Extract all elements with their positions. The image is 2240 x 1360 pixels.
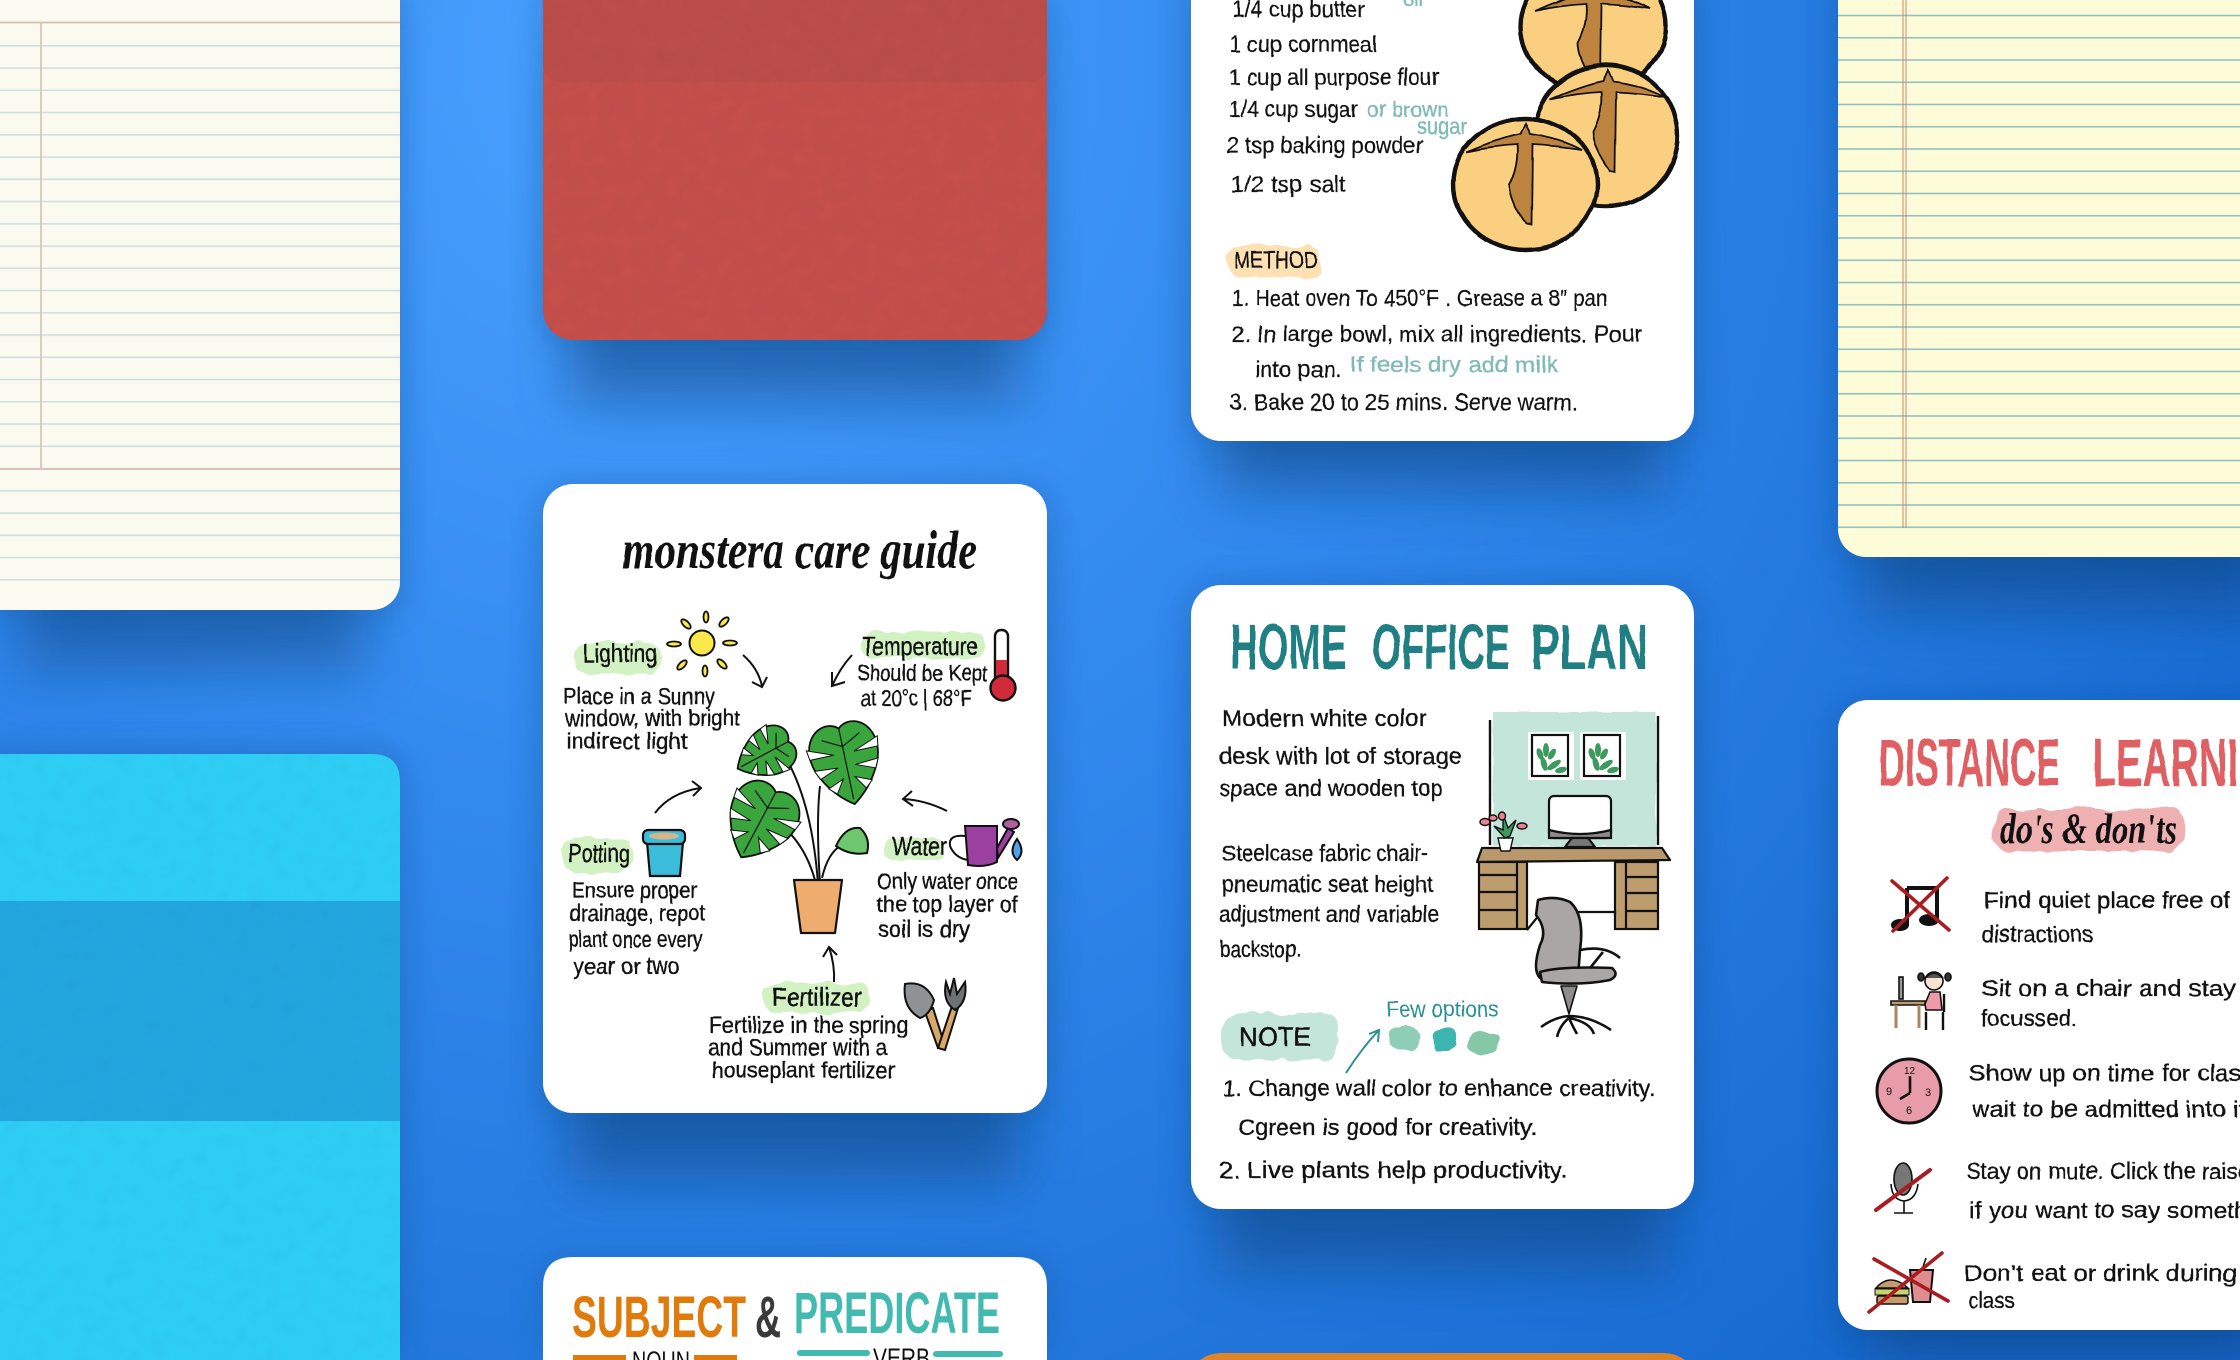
text: lighting: Lighting [583, 638, 657, 668]
heading: monstera care guide: monstera care guide [622, 520, 977, 580]
panel: cream ruled notebook page [0, 0, 406, 670]
method steps: 2. In large bowl, mix all ingredients. Pour [1232, 321, 1642, 347]
ingredients list: 1 cup cornmeal [1229, 31, 1377, 57]
method steps: 3. Bake 20 to 25 mins. Serve warm. [1229, 389, 1578, 415]
icon: monstera plant [709, 716, 890, 933]
panel: home office plan card [1185, 582, 1700, 1270]
icon: garden tools [905, 978, 966, 1050]
text: do item 3 [1969, 1060, 2240, 1122]
ingredients list: 1 cup all purpose flour [1229, 64, 1439, 90]
icon: clock: 12 [1904, 1066, 1916, 1077]
text: water: Only water once [877, 868, 1018, 894]
icon: blue pot [643, 830, 685, 876]
text: fertilizer: Fertilize in the spring [709, 1012, 908, 1038]
icon: clock: 3 [1925, 1087, 1931, 1099]
icon: clock: 9 [1886, 1086, 1892, 1098]
method steps: If feels dry add milk [1350, 352, 1559, 377]
heading: home office plan: OFFICE [1372, 611, 1510, 683]
ingredients list: or brown [1367, 97, 1449, 122]
arrow: temperature to plant [832, 655, 852, 686]
text: notes list [1219, 1075, 1655, 1183]
icon: office chair [1536, 898, 1620, 1037]
subheading blob [1993, 809, 2186, 851]
text: do item 5 [1964, 1260, 2237, 1313]
illustration: bread buns [1453, 0, 1678, 250]
text: do item 5: Don't eat or drink during [1964, 1260, 2237, 1286]
heading: predicate: PREDICATE [794, 1281, 1000, 1346]
heading: home office plan: HOME [1230, 611, 1347, 683]
arrow: lighting to plant [743, 655, 767, 687]
text: fertilizer: and Summer with a [708, 1034, 887, 1060]
text: chair description: adjustment and variable [1219, 901, 1439, 927]
icon: no music [1891, 878, 1949, 931]
method steps: 1. Heat oven To 450°F . Grease a 8″ pan [1232, 285, 1608, 311]
text: potting: Ensure proper [572, 877, 697, 903]
text: lighting: indirect light [566, 728, 689, 754]
text: desk description [1219, 705, 1462, 801]
ingredients list [1227, 0, 1467, 197]
heading: home office plan: PLAN [1531, 611, 1648, 683]
heading: method: METHOD [1234, 247, 1318, 274]
note blob [1221, 1014, 1339, 1060]
text: water: Water [892, 831, 947, 861]
text: do item 2: focussed. [1981, 1005, 2077, 1031]
text: potting: Potting [568, 838, 630, 868]
panel: cyan notebook cover [0, 748, 406, 1360]
icon: no food or drink [1869, 1253, 1948, 1312]
heading: home office plan [1230, 611, 1648, 683]
icon: muted microphone [1876, 1163, 1930, 1213]
panel: monstera care guide card [537, 482, 1053, 1180]
text: potting: plant once every [568, 926, 702, 952]
text: fertilizer: houseplant fertilizer [712, 1057, 895, 1083]
text: potting: drainage, repot [570, 900, 706, 926]
panel: subject and predicate card [537, 1255, 1053, 1360]
ingredients list: sugar [1417, 114, 1467, 139]
text: notes list: 2. Live plants help productivity. [1219, 1157, 1568, 1183]
text: notes list: 1. Change wall color to enhance creativity. [1223, 1075, 1655, 1101]
text: do item 1: Find quiet place free of [1984, 887, 2231, 913]
text: do item 5: class [1968, 1287, 2015, 1313]
text: do item 3: Show up on time for class [1969, 1060, 2240, 1086]
icon: potted flowers [1480, 812, 1527, 851]
heading: subject: SUBJECT [572, 1285, 746, 1350]
arrow: water to plant [903, 791, 947, 811]
text: desk description: desk with lot of storage [1219, 743, 1462, 769]
text: lighting: Place in a Sunny [563, 683, 715, 709]
text: do item 1 [1982, 887, 2231, 947]
text: fertilizer [708, 982, 908, 1083]
text: chair description [1219, 840, 1439, 962]
panel: red notebook cover [537, 0, 1053, 400]
text: temperature: at 20°c | 68°F [861, 685, 972, 711]
text: chair description: backstop. [1220, 936, 1301, 962]
arrow: potting to plant [655, 781, 701, 813]
panel: yellow legal pad [1832, 0, 2240, 610]
panel: distance learning card [1832, 698, 2240, 1360]
illustration: home office desk [1477, 712, 1670, 1037]
text: potting [568, 838, 706, 979]
highlight blobs [561, 632, 986, 1013]
text: do item 4 [1966, 1158, 2240, 1223]
text: fertilizer: Fertilizer [772, 982, 862, 1012]
text: lighting [563, 638, 741, 754]
text: few options: Few options [1386, 996, 1499, 1022]
text: do item 2 [1981, 975, 2237, 1031]
ingredients list: 1/2 tsp salt [1231, 171, 1347, 197]
arrow: note to options [1346, 1030, 1379, 1073]
text: lighting: window, with bright [564, 705, 741, 731]
text: temperature: Temperature [862, 631, 978, 661]
text: do item 3: wait to be admitted into it [1971, 1096, 2240, 1122]
text: temperature [857, 631, 989, 711]
ingredients list: 2 tsp baking powder [1227, 132, 1423, 158]
text: desk description: Modern white color [1222, 705, 1427, 731]
icon: girl at desk [1891, 972, 1951, 1030]
text: desk description: space and wooden top [1219, 775, 1443, 801]
subheading: do's and don'ts: do's & don'ts [2000, 807, 2177, 853]
heading: distance learning: DISTANCE [1879, 725, 2060, 801]
text: notes list: Cgreen is good for creativity. [1238, 1114, 1537, 1140]
heading: note: NOTE [1239, 1022, 1311, 1052]
heading: ampersand: & [755, 1285, 781, 1350]
icon: clock: 6 [1906, 1105, 1912, 1117]
icon: thermometer [990, 630, 1016, 700]
label: noun [573, 1351, 737, 1360]
text: do item 2: Sit on a chair and stay [1981, 975, 2237, 1001]
text: chair description: Steelcase fabric chair- [1222, 840, 1428, 866]
text: do item 1: distractions [1982, 921, 2093, 947]
method steps [1229, 285, 1642, 415]
text: chair description: pneumatic seat height [1222, 871, 1434, 897]
heading blob: method [1228, 246, 1320, 278]
arrow: fertilizer to plant [823, 947, 837, 982]
icon: clock [1877, 1059, 1941, 1123]
panel: orange notebook cover [1200, 1353, 1685, 1360]
ingredients list: 1/4 cup sugar [1229, 96, 1358, 122]
label: verb [797, 1348, 1003, 1360]
panel: recipe card [1185, 0, 1700, 490]
text: temperature: Should be Kept [857, 660, 989, 686]
text: water: soil is dry [878, 916, 970, 942]
method steps: into pan. [1255, 356, 1342, 382]
text: water [877, 831, 1019, 942]
text: potting: year or two [573, 953, 680, 979]
text: water: the top layer of [877, 891, 1019, 917]
icon: watering can [950, 819, 1022, 866]
colour swatches [1389, 1029, 1500, 1053]
icon: sun [667, 612, 737, 676]
